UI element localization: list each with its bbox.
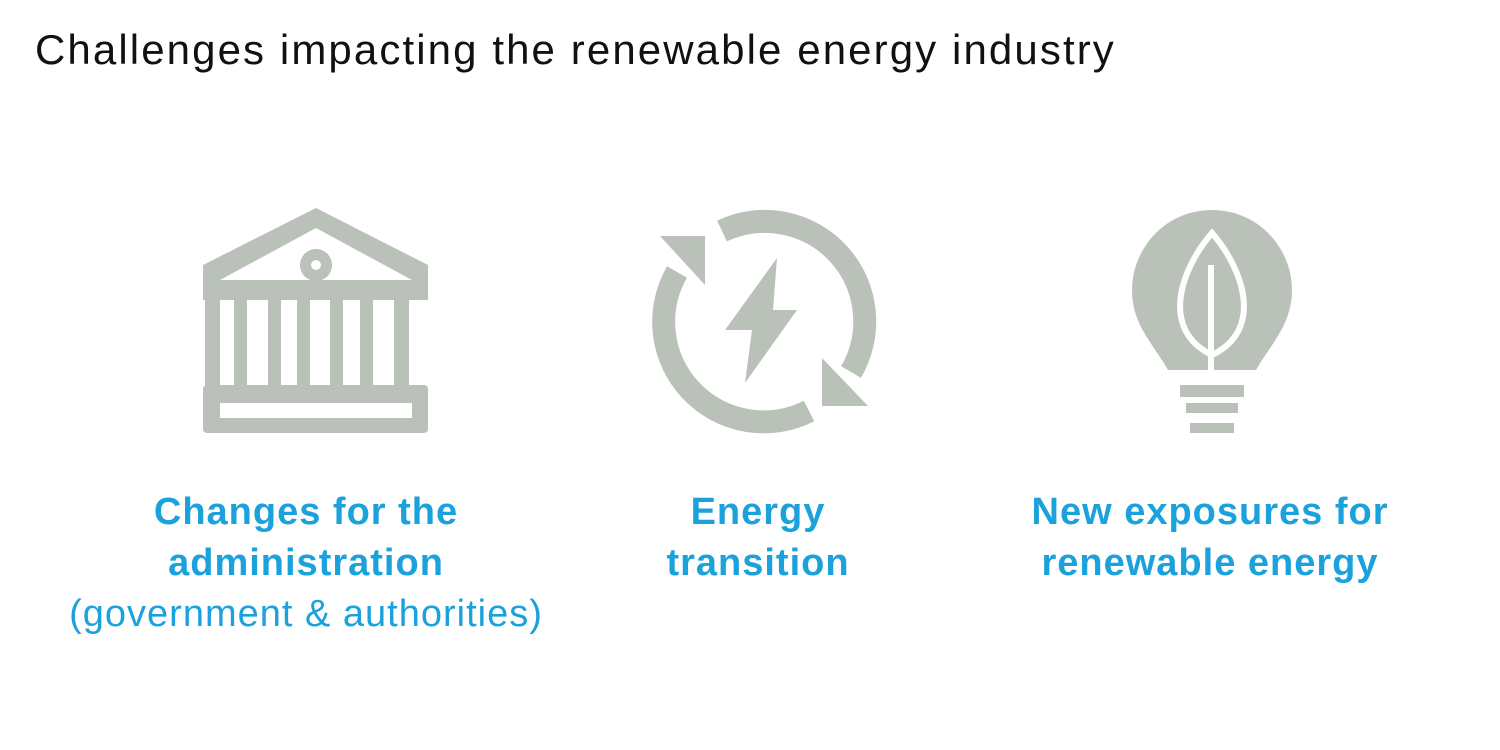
label: new exposures: New exposures for bbox=[1032, 491, 1388, 533]
label: new exposures bbox=[1032, 491, 1388, 584]
label: administration bbox=[69, 491, 543, 635]
label: new exposures: renewable energy bbox=[1041, 542, 1379, 584]
icon: government building bbox=[203, 208, 428, 433]
icon: energy cycle bbox=[660, 221, 868, 422]
label: administration: (government & authorities) bbox=[69, 593, 543, 635]
label: energy transition bbox=[666, 491, 850, 584]
icon: light bulb with leaf bbox=[1132, 210, 1292, 433]
label: energy transition: Energy bbox=[691, 491, 825, 533]
label: energy transition: transition bbox=[666, 542, 850, 584]
label: administration: administration bbox=[168, 542, 444, 584]
title: Challenges impacting the renewable energy industry bbox=[35, 26, 1116, 73]
label: administration: Changes for the bbox=[154, 491, 458, 533]
